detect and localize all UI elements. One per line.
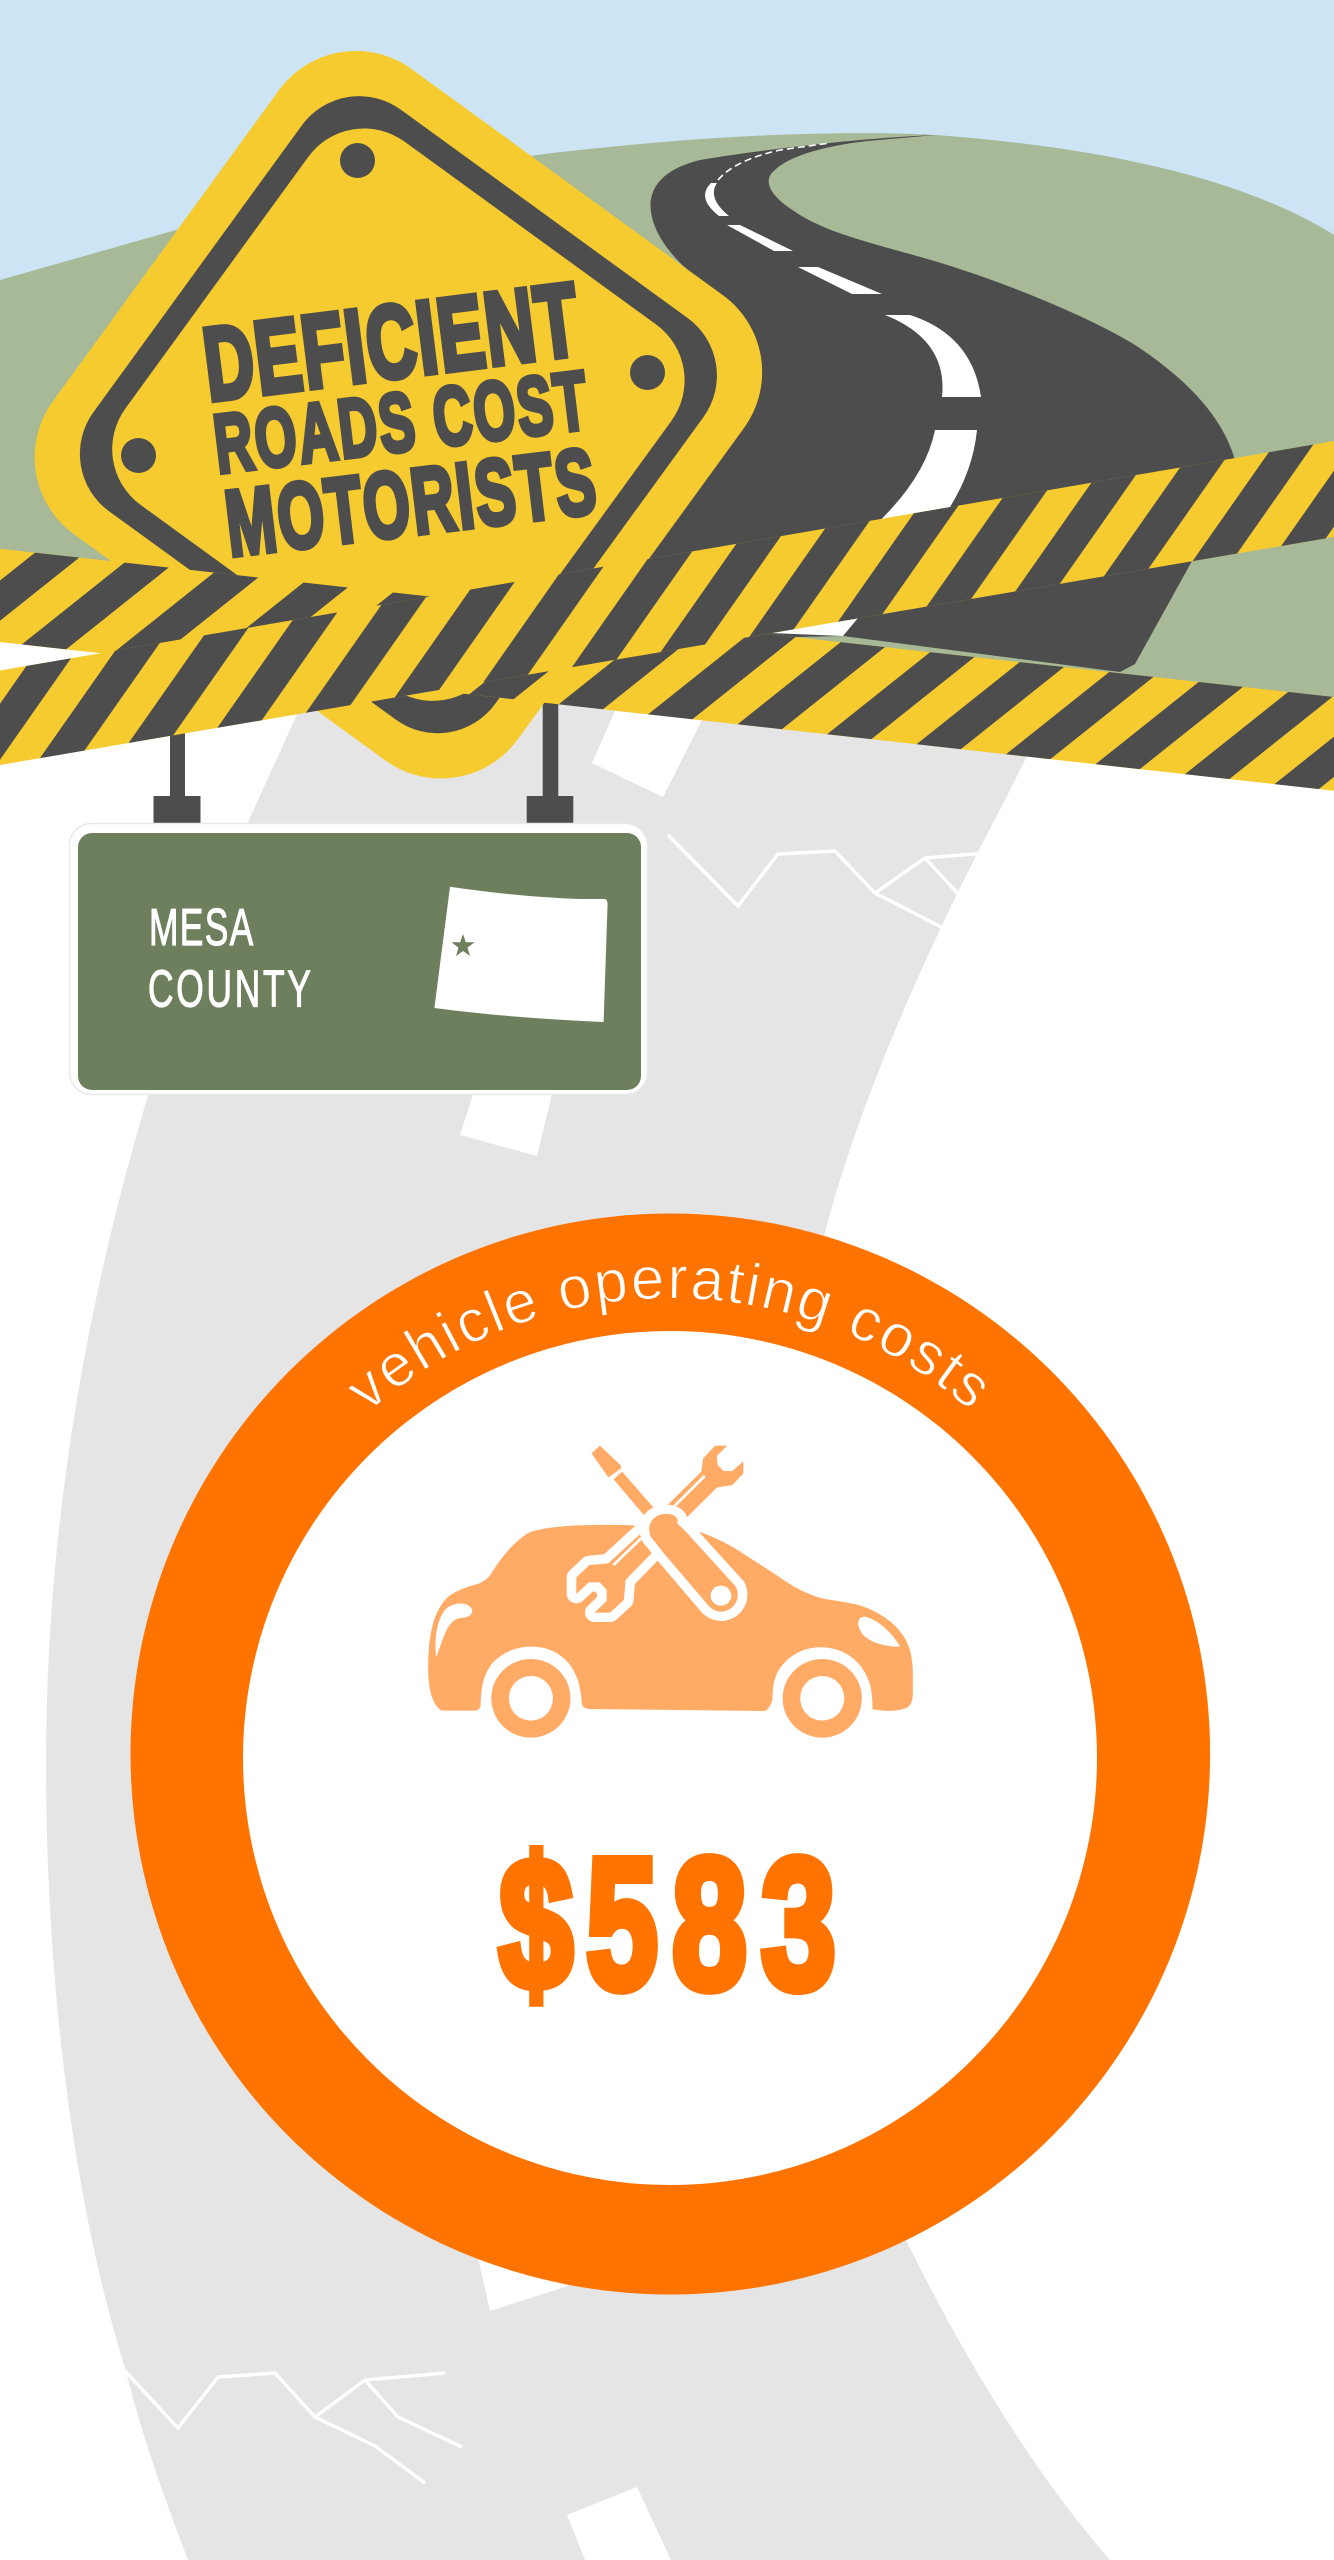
sign title: MOTORISTS bbox=[220, 428, 603, 576]
sign title: ROADS COST bbox=[209, 353, 595, 491]
icon: car with tools bbox=[428, 1446, 913, 1738]
wrench bbox=[576, 1446, 743, 1613]
car wheels bbox=[491, 1659, 862, 1738]
cost figure: 8 bbox=[672, 1821, 747, 2028]
sign title: DEFICIENT bbox=[198, 262, 587, 423]
rising hazard tape bbox=[0, 441, 1334, 765]
cost figure: 3 bbox=[761, 1821, 836, 2028]
sign posts bbox=[154, 690, 573, 826]
winding road bbox=[620, 135, 1235, 672]
orange cost ring bbox=[130, 1214, 1210, 2294]
ring label: vehicle operating costs bbox=[348, 1262, 985, 1406]
sign title bbox=[198, 262, 603, 576]
county highway sign bbox=[70, 824, 648, 1094]
cost figure: $ bbox=[499, 1821, 573, 2028]
road centre dashes bbox=[705, 143, 981, 636]
car lights bbox=[435, 1604, 900, 1657]
diamond warning sign bbox=[0, 13, 800, 816]
county name: MESA bbox=[149, 899, 255, 957]
icon: Colorado map with star bbox=[434, 887, 608, 1022]
cost figure: 5 bbox=[586, 1821, 658, 2028]
car body bbox=[428, 1525, 913, 1711]
sky bbox=[0, 0, 1334, 420]
mountain line upper bbox=[668, 835, 1010, 929]
mountain line lower bbox=[125, 2371, 462, 2483]
descending hazard tape bbox=[0, 549, 1334, 791]
background grey road bbox=[46, 620, 1110, 2560]
screwdriver bbox=[591, 1446, 738, 1612]
green hills bbox=[0, 133, 1334, 745]
county name bbox=[148, 899, 314, 1018]
county name: COUNTY bbox=[148, 961, 314, 1018]
sign bolts bbox=[121, 143, 665, 473]
